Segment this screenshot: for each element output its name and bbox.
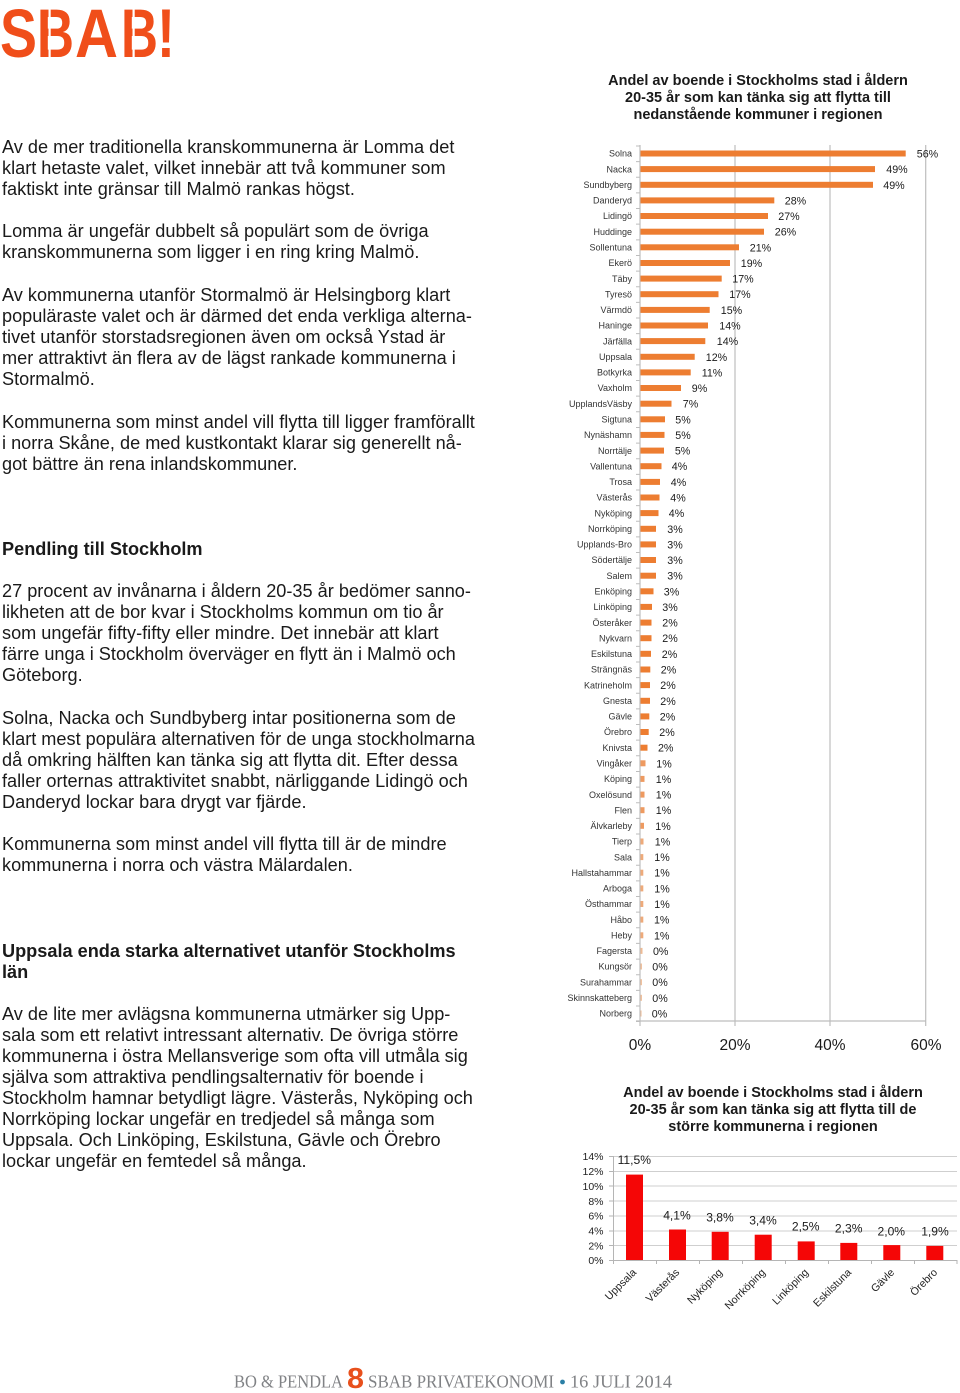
text block: Helsingborg <box>2 284 472 389</box>
logo: SBAB! <box>0 0 175 64</box>
x axis labels: 0% <box>629 1037 651 1054</box>
value labels <box>618 1153 949 1238</box>
category labels: Skinnskatteberg <box>567 993 632 1003</box>
value labels: 1% <box>656 774 672 786</box>
value labels: 4% <box>670 492 686 504</box>
category labels: Västerås <box>596 493 632 503</box>
value labels: 2% <box>662 618 678 630</box>
value labels: 0% <box>652 962 668 974</box>
value labels: 1% <box>654 868 670 880</box>
value labels: 4% <box>672 461 688 473</box>
heading: Uppsala enda starka alternativet: Uppsala enda starka alternativet utanför Stockholms <box>2 940 456 960</box>
x axis labels <box>629 1037 942 1054</box>
category labels: Sollentuna <box>589 242 632 252</box>
category labels: Strängnäs <box>591 665 632 675</box>
value labels: 11,5% <box>618 1153 651 1167</box>
y axis labels: 12% <box>582 1166 604 1178</box>
value labels: 1% <box>656 758 672 770</box>
x axis labels: 60% <box>910 1037 942 1054</box>
category labels: Sala <box>614 852 632 862</box>
rotated category labels: Nyköping <box>685 1267 725 1307</box>
chart title: kommuner i regionen <box>608 73 908 123</box>
category labels <box>567 149 632 1019</box>
value labels: 15% <box>721 305 743 317</box>
value labels: 3,8% <box>706 1210 734 1224</box>
text block: 27 procent: 27 procent av invånarna i åldern 20-35 år bedömer sanno- <box>2 580 471 600</box>
text block: Solna, Nacka, Sundbyberg: Danderyd lockar bara drygt var fjärde. <box>2 792 307 812</box>
value labels: 1% <box>654 899 670 911</box>
category labels: Håbo <box>610 915 632 925</box>
value labels: 2% <box>660 711 676 723</box>
value labels: 9% <box>692 383 708 395</box>
text block: Solna, Nacka, Sundbyberg: då omkring hälften kan tänka sig att flytta dit. Efter dessa <box>2 750 458 770</box>
value labels: 2% <box>662 633 678 645</box>
footer: SBAB PRIVATEKONOMI <box>368 1372 554 1392</box>
y axis labels: 14% <box>582 1151 604 1163</box>
text block: minst andel Mälardalen: kommunerna i norra och västra Mälardalen. <box>2 855 353 875</box>
chart title: kommuner i regionen: Andel av boende i Stockholms stad i åldern <box>608 73 908 89</box>
x axis labels: 40% <box>814 1037 846 1054</box>
value labels: 27% <box>778 211 800 223</box>
rotated category labels: Eskilstuna <box>811 1267 854 1310</box>
value labels: 21% <box>750 242 772 254</box>
category labels: Norberg <box>599 1009 632 1019</box>
text block: Lomma intro: klart hetaste valet, vilket innebär att två kommuner som <box>2 158 446 178</box>
text block: Lomma intro: Av de mer traditionella kranskommunerna är Lomma det <box>2 136 454 156</box>
footer: BO & PENDLA <box>234 1372 343 1392</box>
value labels: 1% <box>654 930 670 942</box>
text block: Lomma compared: kranskommunerna som ligger i en ring kring Malmö. <box>2 242 419 262</box>
chart title: större kommuner: 20-35 år som kan tänka sig att flytta till de <box>630 1102 916 1118</box>
text block: Helsingborg: Stormalmö. <box>2 369 95 389</box>
text block: Solna, Nacka, Sundbyberg: faller orternas attraktivitet snabbt, närliggande Lidingö och <box>2 771 468 791</box>
category labels: Linköping <box>593 602 632 612</box>
category labels: Värmdö <box>600 305 632 315</box>
text block: minst andel Mälardalen: Kommunerna som minst andel vill flytta till är de mindre <box>2 834 447 854</box>
text block: Uppsala: själva som attraktiva pendlingsalternativ för boende i <box>2 1067 424 1087</box>
category labels: Fagersta <box>596 946 632 956</box>
text block: Solna, Nacka, Sundbyberg: klart mest populära alternativen för de unga stockholmarna <box>2 729 475 749</box>
chart title: större kommuner: Andel av boende i Stockholms stad i åldern <box>623 1085 923 1101</box>
y axis labels: 8% <box>588 1196 604 1208</box>
text block: minst andel Mälardalen <box>2 834 447 875</box>
value labels: 17% <box>729 289 751 301</box>
value labels: 2% <box>662 649 678 661</box>
category labels: Solna <box>609 149 632 159</box>
category labels: Trosa <box>609 477 632 487</box>
value labels: 2,3% <box>835 1221 863 1235</box>
value labels: 1% <box>654 915 670 927</box>
text block: Lomma intro: faktiskt inte gränsar till Malmö rankas högst. <box>2 179 355 199</box>
text block: Lomma intro <box>2 136 454 199</box>
text block: Uppsala: lockar ungefär en femtedel så många. <box>2 1151 307 1171</box>
category labels: Norrtälje <box>598 446 632 456</box>
category labels: Arboga <box>603 884 632 894</box>
text block: norra Skåne <box>2 412 475 474</box>
rotated category labels: Norrköping <box>723 1267 768 1312</box>
text block: Helsingborg: tivet utanför storstadsregionen även om också Ystad är <box>2 327 445 347</box>
category labels: Nynäshamn <box>584 430 632 440</box>
category labels: Salem <box>606 571 632 581</box>
rotated category labels: Västerås <box>644 1267 682 1305</box>
footer <box>234 1363 672 1393</box>
text block: Helsingborg: Av kommunerna utanför Stormalmö är Helsingborg klart <box>2 284 450 304</box>
value labels: 1% <box>655 836 671 848</box>
category labels: Nyköping <box>594 508 632 518</box>
value labels: 11% <box>702 367 723 379</box>
category labels: Lidingö <box>603 211 632 221</box>
category labels: Upplands-Bro <box>577 540 632 550</box>
value labels: 5% <box>675 430 691 442</box>
category labels: Huddinge <box>593 227 632 237</box>
chart title: större kommuner <box>623 1085 923 1135</box>
text block: 27 procent: färre unga i Stockholm överväger en flytt än i Malmö och <box>2 644 456 664</box>
text block: norra Skåne: Kommunerna som minst andel vill flytta till ligger framförallt <box>2 412 475 432</box>
text block: Uppsala: Uppsala. Och Linköping, Eskilstuna, Gävle och Örebro <box>2 1130 441 1150</box>
rotated category labels: Örebro <box>908 1267 940 1299</box>
value labels: 14% <box>717 336 739 348</box>
text block: 27 procent: Göteborg. <box>2 665 83 685</box>
value labels: 0% <box>652 993 668 1005</box>
value labels: 2% <box>660 680 676 692</box>
value labels: 2% <box>658 743 674 755</box>
value labels: 3% <box>667 524 683 536</box>
y axis labels: 0% <box>588 1255 604 1267</box>
bars <box>626 1175 943 1260</box>
value labels: 2,5% <box>792 1220 820 1234</box>
category labels: Heby <box>611 930 632 940</box>
chart title: större kommuner: större kommunerna i regionen <box>668 1119 878 1135</box>
text block: Uppsala: Stockholm hamnar betydligt lägre. Västerås, Nyköping och <box>2 1088 473 1108</box>
value labels: 7% <box>683 399 699 411</box>
category labels: Vaxholm <box>598 383 632 393</box>
value labels: 3,4% <box>749 1213 777 1227</box>
text block: norra Skåne: got bättre än rena inlandskommuner. <box>2 454 297 474</box>
y axis labels: 2% <box>588 1240 604 1252</box>
value labels: 1% <box>656 790 672 802</box>
text block: Solna, Nacka, Sundbyberg <box>2 708 475 812</box>
y axis labels: 4% <box>588 1226 604 1238</box>
category labels: Danderyd <box>593 196 632 206</box>
value labels: 28% <box>785 195 807 207</box>
category labels: Älvkarleby <box>590 821 632 831</box>
category labels: Österåker <box>592 618 632 628</box>
text block: Uppsala: kommunerna i östra Mellansverige som ofta vill utmåla sig <box>2 1046 468 1066</box>
category labels: Flen <box>614 805 632 815</box>
category labels: Surahammar <box>580 977 632 987</box>
value labels: 5% <box>675 414 691 426</box>
category labels: UpplandsVäsby <box>569 399 632 409</box>
category labels: Katrineholm <box>584 680 632 690</box>
category labels: Knivsta <box>602 743 632 753</box>
category labels: Nykvarn <box>599 633 632 643</box>
value labels: 3% <box>662 602 678 614</box>
category labels: Järfälla <box>603 336 632 346</box>
value labels: 3% <box>664 586 680 598</box>
rotated category labels: Linköping <box>770 1267 811 1307</box>
category labels: Ekerö <box>608 258 632 268</box>
category labels: Östhammar <box>585 899 632 909</box>
rotated category labels: Gävle <box>869 1267 897 1295</box>
category labels: Hallstahammar <box>571 868 632 878</box>
category labels: Sigtuna <box>601 414 632 424</box>
text block: Uppsala <box>2 1004 473 1171</box>
category labels: Kungsör <box>598 962 632 972</box>
bar chart: större kommuner <box>582 1151 957 1312</box>
value labels: 5% <box>675 446 691 458</box>
category labels: Vallentuna <box>590 461 632 471</box>
category labels: Tyresö <box>605 289 632 299</box>
footer: 16 JULI 2014 <box>570 1372 672 1392</box>
value labels: 0% <box>652 977 668 989</box>
category labels: Täby <box>612 274 632 284</box>
value labels: 1% <box>655 821 671 833</box>
rotated category labels <box>603 1267 940 1312</box>
category labels: Örebro <box>604 727 632 737</box>
text block: Uppsala: Av de lite mer avlägsna kommunerna utmärker sig Upp- <box>2 1004 450 1024</box>
value labels: 49% <box>883 180 905 192</box>
text block: Lomma compared <box>2 220 429 262</box>
category labels: Enköping <box>594 586 632 596</box>
value labels: 1,9% <box>921 1224 949 1238</box>
value labels: 4% <box>669 508 685 520</box>
category labels: Köping <box>604 774 632 784</box>
bar chart: kommuner i regionen <box>567 145 942 1054</box>
value labels: 1% <box>654 852 670 864</box>
y axis labels: 10% <box>582 1181 604 1193</box>
value labels: 3% <box>667 571 683 583</box>
x axis labels: 20% <box>719 1037 751 1054</box>
category labels: Nacka <box>606 164 632 174</box>
category labels: Norrköping <box>588 524 632 534</box>
text block: 27 procent: som ungefär fifty-fifty eller mindre. Det innebär att klart <box>2 623 439 643</box>
value labels: 1% <box>656 805 672 817</box>
category labels: Tierp <box>612 837 632 847</box>
text block: Helsingborg: mer attraktivt än flera av de lägst rankade kommunerna i <box>2 348 456 368</box>
bars <box>640 150 906 1016</box>
value labels: 3% <box>667 539 683 551</box>
value labels: 2% <box>661 664 677 676</box>
value labels: 14% <box>719 320 741 332</box>
text block: Lomma compared: Lomma är ungefär dubbelt så populärt som de övriga <box>2 220 429 240</box>
value labels: 12% <box>706 352 728 364</box>
value labels: 4% <box>671 477 687 489</box>
value labels: 0% <box>652 1008 668 1020</box>
chart title: kommuner i regionen: 20-35 år som kan tänka sig att flytta till <box>625 90 891 106</box>
category labels: Eskilstuna <box>591 649 632 659</box>
y axis labels <box>582 1151 604 1267</box>
heading: Uppsala enda starka alternativet: län <box>2 962 28 982</box>
value labels: 19% <box>741 258 763 270</box>
text block: 27 procent: likheten att de bor kvar i Stockholms kommun om tio år <box>2 602 444 622</box>
category labels: Gnesta <box>603 696 632 706</box>
value labels: 2% <box>660 696 676 708</box>
value labels: 56% <box>917 148 939 160</box>
category labels: Uppsala <box>599 352 632 362</box>
text block: norra Skåne: i norra Skåne, de med kustkontakt klarar sig generellt nå- <box>2 433 462 453</box>
text block: Helsingborg: populäraste valet och är därmed det enda verkliga alterna- <box>2 306 472 326</box>
rotated category labels: Uppsala <box>603 1267 639 1303</box>
category labels: Gävle <box>608 712 632 722</box>
category labels: Sundbyberg <box>583 180 632 190</box>
chart title: kommuner i regionen: nedanstående kommuner i regionen <box>634 107 882 123</box>
text block: Solna, Nacka, Sundbyberg: Solna, Nacka och Sundbyberg intar positionerna som de <box>2 708 456 728</box>
category labels: Oxelösund <box>589 790 632 800</box>
value labels: 2,0% <box>878 1224 905 1238</box>
value labels: 3% <box>667 555 683 567</box>
value labels: 0% <box>653 946 669 958</box>
heading: Uppsala enda starka alternativet <box>2 940 456 982</box>
text block: Uppsala: Norrköping lockar ungefär en tredjedel så många som <box>2 1109 435 1129</box>
value labels: 49% <box>886 164 908 176</box>
text block: 27 procent <box>2 580 471 685</box>
value labels: 1% <box>654 883 670 895</box>
heading: Pendling till Stockholm: Pendling till Stockholm <box>2 538 203 558</box>
value labels <box>652 148 939 1020</box>
category labels: Vingåker <box>597 758 632 768</box>
y axis labels: 6% <box>588 1210 604 1222</box>
value labels: 26% <box>775 227 797 239</box>
value labels: 2% <box>659 727 675 739</box>
category labels: Södertälje <box>591 555 632 565</box>
value labels: 17% <box>732 274 754 286</box>
text block: Uppsala: sala som ett relativt intressant alternativ. De övriga större <box>2 1025 458 1045</box>
category labels: Haninge <box>598 321 632 331</box>
value labels: 4,1% <box>663 1208 691 1222</box>
category labels: Botkyrka <box>597 368 632 378</box>
